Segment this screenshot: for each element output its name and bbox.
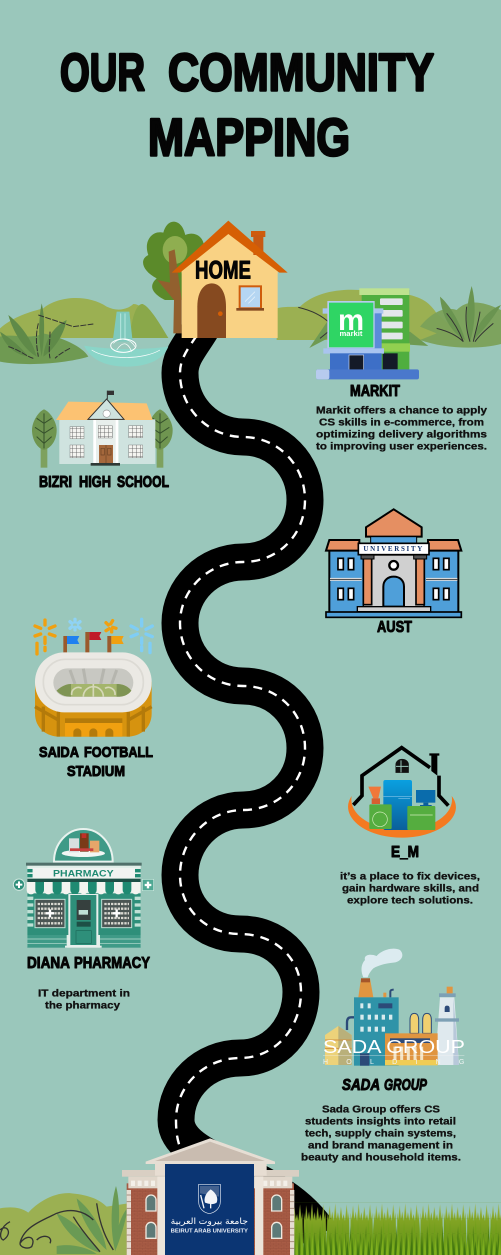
- text: markit description: optimizing delivery algorithms: [316, 428, 487, 440]
- icon: shopfront: PHARMACY: [53, 868, 114, 878]
- label: bizri high school: [39, 474, 169, 491]
- title: COMMUNITY: [168, 44, 434, 102]
- icon: fountain: [84, 312, 168, 367]
- icon: tree: [143, 222, 204, 333]
- text: markit description: CS skills in e-commerce, from: [319, 416, 484, 428]
- text: sada group description: students insights into retail: [305, 1116, 456, 1128]
- label: sada group: GROUP: [384, 1077, 427, 1094]
- label: aust: AUST: [377, 619, 412, 636]
- label: diana pharmacy: DIANA: [27, 955, 70, 972]
- icon: factory: [325, 978, 459, 1066]
- text: sada group description: tech, supply chain systems,: [305, 1128, 456, 1140]
- icon: fireworks: [35, 619, 152, 654]
- text: pharmacy description: [38, 988, 130, 1012]
- text: pharmacy description: IT department in: [38, 988, 130, 1000]
- stadium illustration: [35, 619, 152, 737]
- markit illustration: m: [338, 304, 364, 337]
- text: sada group description: beauty and household items.: [301, 1152, 461, 1164]
- icon: shopfront: [26, 863, 142, 948]
- icon: grass: [288, 1203, 501, 1255]
- home illustration: [0, 221, 501, 367]
- label: bizri high school: SCHOOL: [117, 474, 169, 491]
- aust illustration: [326, 509, 461, 617]
- label: sada group: [342, 1077, 427, 1094]
- label: diana pharmacy: [27, 955, 151, 972]
- label: saida football stadium: SAIDA: [39, 744, 79, 761]
- label: saida football stadium: FOOTBALL: [84, 744, 153, 761]
- label: bizri high school: HIGH: [79, 474, 111, 491]
- icon: beirut arab university logo: [171, 1184, 248, 1234]
- logo text: sada group holding: SADA GROUP: [323, 1036, 465, 1057]
- icon: stadium: [35, 652, 152, 737]
- text: e_m description: [340, 870, 480, 906]
- text: e_m description: gain hardware skills, and: [342, 882, 479, 894]
- label: sada group: SADA: [342, 1077, 380, 1094]
- pharmacy illustration: [13, 829, 154, 948]
- markit illustration: markit: [340, 329, 363, 338]
- text: markit description: Markit offers a chance to apply: [316, 404, 487, 416]
- icon: left bush: [0, 303, 93, 364]
- text: pharmacy description: the pharmacy: [45, 1000, 120, 1012]
- icon: beirut arab university logo: جامعة بيروت العربية: [171, 1216, 248, 1226]
- text: e_m description: it’s a place to fix devices,: [340, 870, 480, 882]
- aust illustration: UNIVERSITY: [363, 545, 424, 553]
- label: saida football stadium: STADIUM: [67, 763, 125, 780]
- icon: university building: [122, 1138, 299, 1255]
- markit illustration: [316, 288, 419, 379]
- icon: right plus sign: [142, 879, 154, 891]
- label: diana pharmacy: PHARMACY: [74, 955, 151, 972]
- logo text: sada group holding: [323, 1036, 465, 1066]
- icon: smoke: [362, 949, 402, 977]
- bizri high school illustration: [32, 391, 173, 468]
- text: sada group description: [301, 1104, 461, 1164]
- icon: left plus sign: [13, 879, 25, 890]
- title: [60, 44, 434, 168]
- title: OUR: [60, 44, 145, 102]
- icon: dome with bottles: [54, 829, 113, 862]
- icon: flags: [63, 632, 124, 653]
- logo text: sada group holding: HOLDING: [323, 1059, 464, 1066]
- text: markit description: [316, 404, 487, 452]
- landscape: hills behind home: [0, 290, 467, 348]
- bottom landscape and university: [0, 1138, 501, 1255]
- e_m illustration: [348, 748, 456, 838]
- label: e_m: E_M: [391, 844, 419, 861]
- road: [176, 322, 320, 1235]
- text: sada group description: and brand management in: [308, 1140, 453, 1152]
- icon: appliances: [368, 780, 435, 830]
- icon: orange swoosh: [348, 796, 456, 838]
- label: markit: MARKIT: [350, 383, 400, 400]
- icon: left hedge: [0, 1186, 128, 1255]
- text: sada group description: Sada Group offers CS: [322, 1104, 440, 1116]
- label: home: HOME: [195, 256, 251, 284]
- text: markit description: to improving user experiences.: [316, 440, 487, 452]
- icon: beirut arab university logo: BEIRUT ARAB UNIVERSITY: [171, 1228, 248, 1234]
- label: saida football stadium: [39, 744, 153, 780]
- label: bizri high school: BIZRI: [39, 474, 72, 491]
- icon: right bush: [420, 286, 501, 348]
- icon: house: [172, 221, 288, 338]
- sada group illustration: [323, 949, 465, 1066]
- icon: house outline: [353, 748, 448, 806]
- title: MAPPING: [148, 108, 350, 168]
- text: e_m description: explore tech solutions.: [347, 894, 473, 906]
